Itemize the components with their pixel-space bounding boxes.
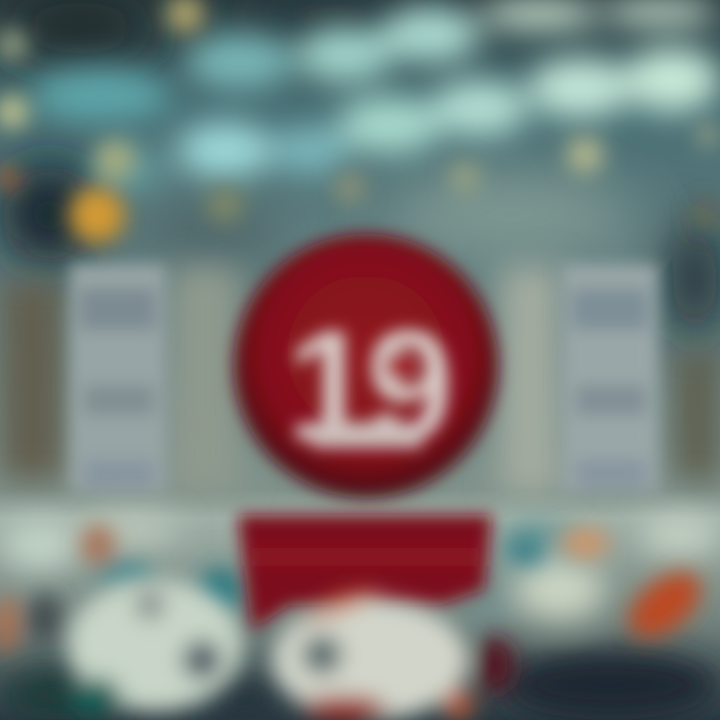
teal clouds	[28, 0, 720, 192]
right banner panels	[562, 264, 658, 492]
red ball with number	[234, 234, 498, 498]
bokeh lights	[0, 0, 719, 243]
side walls	[0, 265, 720, 495]
icon: front soccer ball	[272, 591, 515, 720]
ball sphere	[234, 234, 498, 498]
ground	[0, 515, 720, 720]
pedestal	[238, 515, 492, 630]
icon: left soccer ball	[67, 579, 243, 714]
left banner panels	[70, 264, 166, 492]
dark clouds and edges	[0, 0, 720, 345]
confetti patches	[0, 525, 713, 655]
number 19: 19	[286, 298, 449, 474]
